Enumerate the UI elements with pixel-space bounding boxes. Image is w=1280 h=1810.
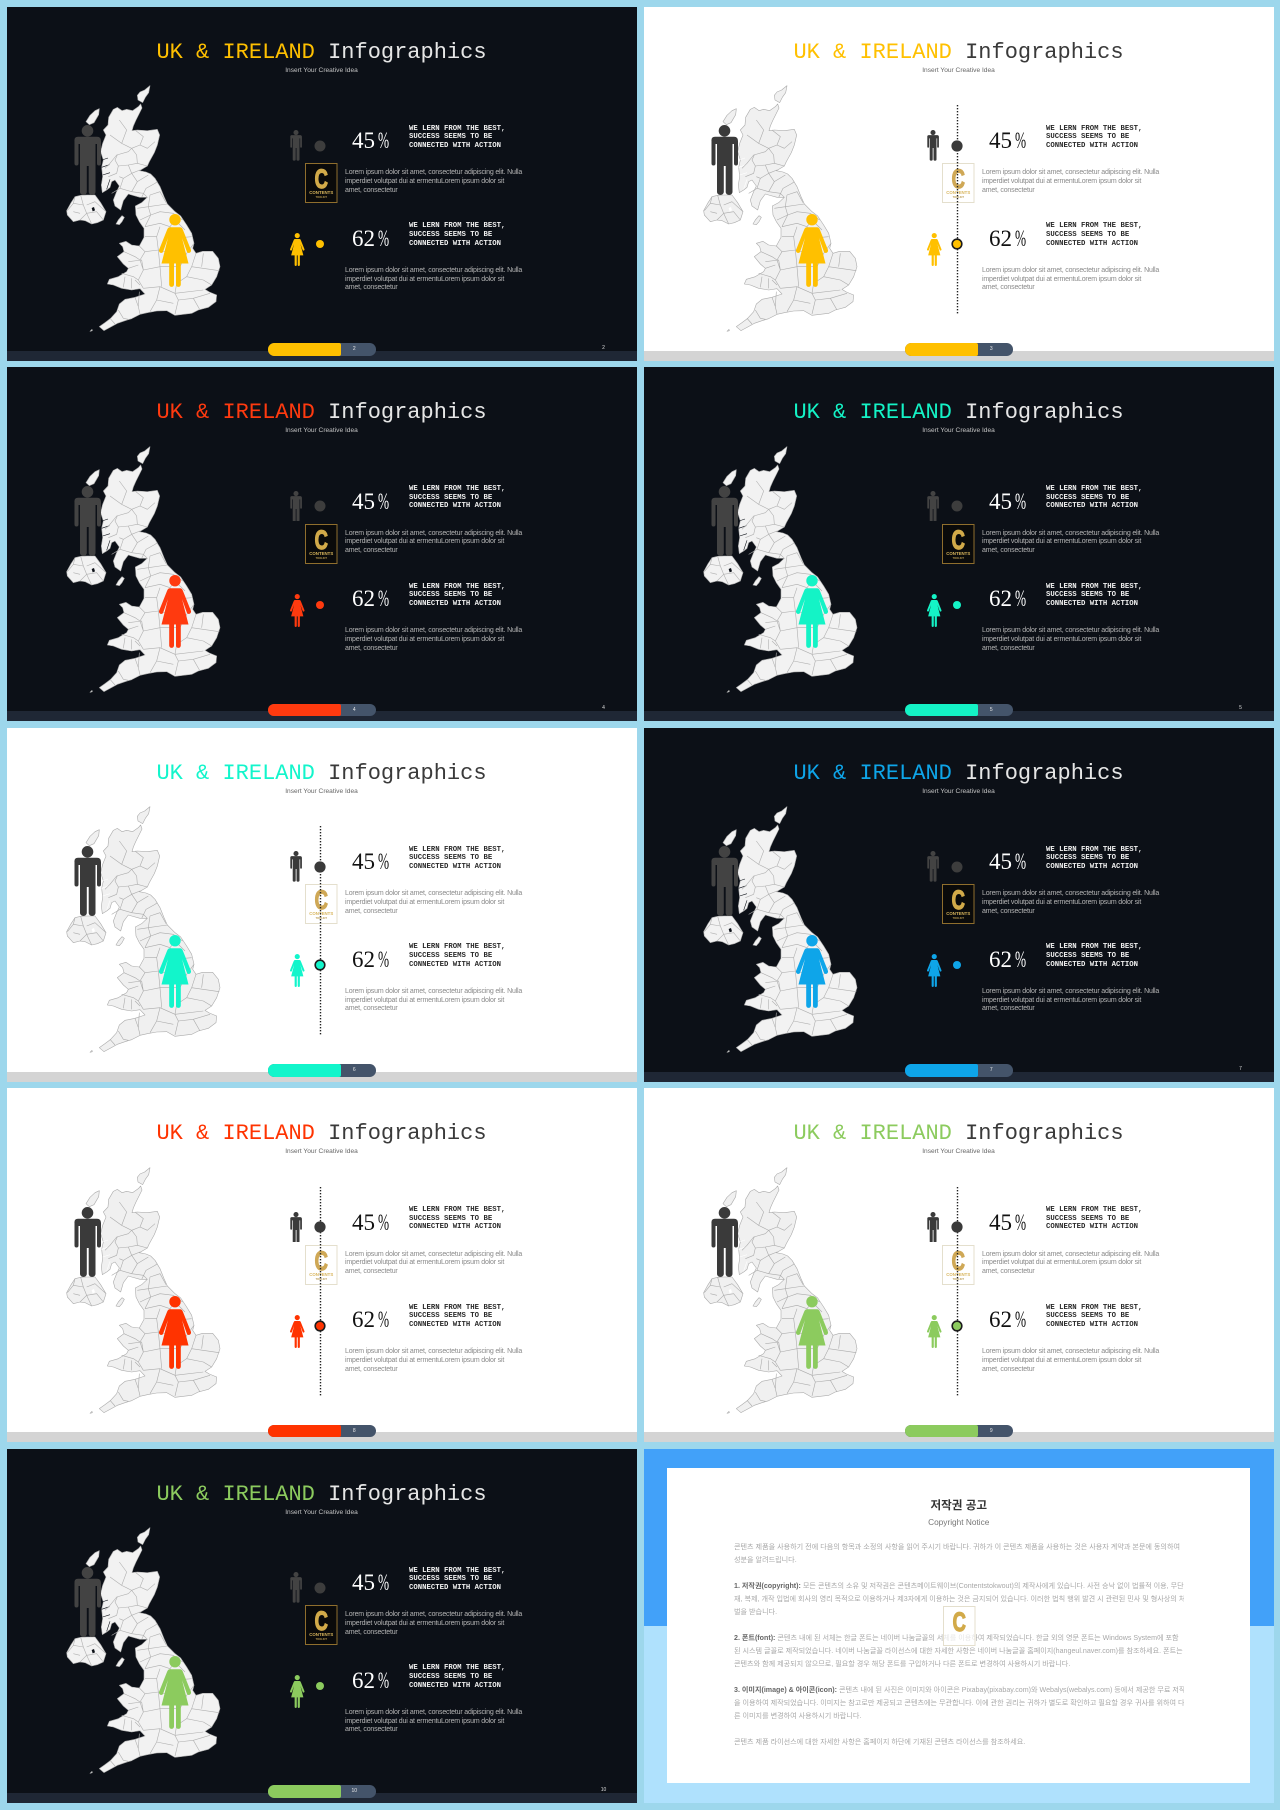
progress pill [905,343,1012,356]
icon: large woman [796,575,828,648]
text block: notice body: 콘텐츠와 함께 제공되지 않으므로, 필요할 경우 해당 폰트를 구입하거나 다른 폰트로 변경하여 사용하시기 바랍니다. [734,1660,1070,1668]
logo: TOOLKIT [316,916,327,920]
icon: large woman [159,214,191,287]
stat: 45%: % [378,1570,389,1595]
heading: first statement: WE LERN FROM THE BEST, SUCCESS SEEMS TO BE CONNECTED WITH ACTION [409,485,505,510]
subtitle: Insert Your Creative Idea [922,66,995,74]
heading: first statement: WE LERN FROM THE BEST, SUCCESS SEEMS TO BE CONNECTED WITH ACTION [409,1566,505,1592]
footer bar [6,1792,637,1802]
stat: 62% [352,1666,397,1694]
progress pill [905,704,1012,716]
icon: small man [290,1212,302,1242]
logo: C [952,884,965,915]
progress pill: 8 [353,1428,356,1434]
logo: CONTENTS [946,1272,970,1276]
icon: large woman [796,935,828,1008]
footer bar [644,350,1274,360]
stat: 62% [989,1306,1034,1334]
text block: notice body: 벌을 받습니다. [734,1608,777,1616]
stat: 45%: % [1015,488,1026,514]
text block: first body: Lorem ipsum dolor sit amet, consectetur adipiscing elit. Nulla imperdiet volutpat dui at ermentuLorem ipsum dolor sit amet, consectetur [982,1251,1159,1275]
heading: first statement: WE LERN FROM THE BEST, SUCCESS SEEMS TO BE CONNECTED WITH ACTION [1046,846,1142,871]
stat: 62%: 62 [352,586,375,611]
marker: grey dot [314,500,326,512]
logo: C [952,1245,965,1275]
icon: small woman [927,954,942,987]
heading: second statement: WE LERN FROM THE BEST, SUCCESS SEEMS TO BE CONNECTED WITH ACTION [409,583,505,608]
stat: 45%: 45 [989,1210,1012,1234]
page number: 2 [602,344,605,350]
stat: 62%: % [378,586,389,611]
text block: first body: Lorem ipsum dolor sit amet, consectetur adipiscing elit. Nulla imperdiet volutpat dui at ermentuLorem ipsum dolor sit amet, consectetur [982,530,1159,554]
icon: large man [74,846,100,916]
logo: C [952,163,965,194]
text block: second body: Lorem ipsum dolor sit amet, consectetur adipiscing elit. Nulla imperdiet volutpat dui at ermentuLorem ipsum dolor sit amet, consectetur [982,1348,1159,1373]
progress pill [905,1064,1012,1077]
text block: second body: Lorem ipsum dolor sit amet, consectetur adipiscing elit. Nulla imperdiet volutpat dui at ermentuLorem ipsum dolor sit amet, consectetur [345,1709,522,1733]
page number: 10 [601,1786,606,1792]
text block: second body: Lorem ipsum dolor sit amet, consectetur adipiscing elit. Nulla imperdiet volutpat dui at ermentuLorem ipsum dolor sit amet, consectetur [345,988,522,1012]
stat: 62%: 62 [989,226,1012,250]
marker: accent dot [313,958,327,972]
logo: C [315,163,328,194]
marker: dark dot [313,1220,327,1234]
progress pill [268,1425,376,1437]
icon: small woman [290,1314,304,1348]
panel: slide 6 light teal [6,728,637,1082]
heading: second statement: WE LERN FROM THE BEST, SUCCESS SEEMS TO BE CONNECTED WITH ACTION [409,1664,505,1690]
stat: 62%: 62 [352,1307,375,1332]
logo: CONTENTS [309,1272,333,1276]
subtitle: Insert Your Creative Idea [285,1148,358,1155]
stat: 62%: % [378,1307,389,1332]
icon: small woman [927,233,942,266]
icon: large man [710,846,738,916]
title: UK & IRELAND Infographics [156,1121,487,1146]
text block: notice body: 을 이용하여 제작되었습니다. 이미지는 참고로만 제공되고 콘텐츠에는 무관합니다. 이에 관한 권리는 귀하가 별도로 확인하고 필요할 경우 귀사를 위하여 다 [734,1699,1184,1707]
stat: 45% [352,1208,397,1236]
footer bar [6,1072,637,1082]
logo: CONTENTS [946,190,970,195]
stat: 62% [352,946,397,974]
heading: first statement: WE LERN FROM THE BEST, SUCCESS SEEMS TO BE CONNECTED WITH ACTION [409,846,505,871]
icon: small man [927,1212,939,1242]
icon: small woman [290,594,304,627]
stat: 62%: % [1015,226,1026,250]
dotted timeline [956,105,958,314]
panel: slide 9 light green [644,1088,1274,1442]
heading: first statement: WE LERN FROM THE BEST, SUCCESS SEEMS TO BE CONNECTED WITH ACTION [1046,485,1142,510]
heading: first statement: WE LERN FROM THE BEST, SUCCESS SEEMS TO BE CONNECTED WITH ACTION [409,1206,505,1231]
logo: CONTENTS [946,911,970,916]
page number: 4 [602,705,605,711]
logo: TOOLKIT [316,556,327,560]
icon: large man [74,1567,100,1637]
logo: CONTENTS [309,911,333,916]
logo: TOOLKIT [316,195,327,199]
icon: small man [927,491,939,521]
marker: dark dot [313,860,327,874]
icon: large man [710,1206,738,1276]
stat: 45%: 45 [352,128,375,153]
footer bar [644,1072,1274,1082]
logo [942,524,974,564]
marker: accent dot [951,238,963,250]
text block: first body: Lorem ipsum dolor sit amet, consectetur adipiscing elit. Nulla imperdiet volutpat dui at ermentuLorem ipsum dolor sit amet, consectetur [982,169,1159,194]
text block: second body: Lorem ipsum dolor sit amet, consectetur adipiscing elit. Nulla imperdiet volutpat dui at ermentuLorem ipsum dolor sit amet, consectetur [982,267,1159,291]
panel: slide 4 dark red [6,367,637,721]
logo: TOOLKIT [953,195,964,199]
map: UK and Ireland [60,1162,240,1432]
heading: copyright notice English: Copyright Notice [928,1517,989,1527]
icon: large man [74,1206,100,1276]
page number: 5 [1239,705,1242,711]
page number: 7 [1239,1066,1242,1072]
progress pill: 10 [351,1788,357,1794]
stat: 45% [352,488,389,514]
progress pill [268,1064,376,1077]
stat: 45% [352,848,397,876]
footer bar [6,711,637,721]
text block: second body: Lorem ipsum dolor sit amet, consectetur adipiscing elit. Nulla imperdiet volutpat dui at ermentuLorem ipsum dolor sit amet, consectetur [345,267,522,291]
map: UK and Ireland [66,446,220,693]
marker: grey dot [950,860,964,874]
stat: 62%: 62 [352,946,375,972]
heading: copyright notice Korean: 저작권 공고 [930,1499,987,1512]
logo [942,1244,974,1284]
title: UK & IRELAND Infographics [156,400,487,425]
text block: notice body: 른 이미지를 변경하여 사용하시기 바랍니다. [734,1712,861,1720]
stat: 62%: % [1015,1307,1026,1332]
logo: C [315,884,328,915]
marker: accent dot [313,1679,327,1693]
marker: grey dot [952,500,962,512]
logo: CONTENTS [946,550,970,556]
subtitle: Insert Your Creative Idea [285,788,358,794]
map: UK and Ireland [60,1522,240,1792]
stat: 62%: % [378,1668,389,1692]
stat: 62% [352,1306,397,1334]
stat: 45%: 45 [352,1210,375,1234]
icon: large woman [159,575,191,648]
logo: TOOLKIT [316,1637,327,1641]
text block: second body: Lorem ipsum dolor sit amet, consectetur adipiscing elit. Nulla imperdiet volutpat dui at ermentuLorem ipsum dolor sit amet, consectetur [345,1348,522,1373]
logo: C [952,524,965,554]
stat: 62%: % [378,226,389,250]
icon: large woman [796,1296,828,1368]
progress pill: 5 [990,707,993,713]
logo: CONTENTS [309,550,333,556]
footer bar [6,1432,637,1442]
icon: small woman [290,954,304,987]
footer bar [6,350,637,360]
icon: small woman [290,1675,304,1708]
icon: small woman [927,594,942,626]
text block: notice body: 콘텐츠 제품 라이선스에 대한 자세한 사항은 홈페이지 하단에 기재된 콘텐츠 라이선스를 참조하세요. [734,1738,1025,1746]
stat: 45% [989,128,1026,153]
stat: 62% [989,946,1034,974]
icon: small woman [290,233,304,266]
subtitle: Insert Your Creative Idea [922,788,995,794]
stat: 62%: 62 [989,586,1012,611]
marker: grey dot [314,140,326,152]
title: UK & IRELAND Infographics [793,40,1124,64]
text block: notice body: 1. 저작권(copyright): 모든 콘텐츠의 소유 및 저작권은 콘텐츠메이트웨이브(Contentstokwout)의 제작사에게 있습니다. 사전 승낙 없이 법률적 이용, 무단전 [734,1582,1184,1590]
stat: 45%: 45 [352,849,375,874]
stat: 45%: % [1015,849,1026,874]
stat: 62% [989,585,1034,613]
heading: second statement: WE LERN FROM THE BEST, SUCCESS SEEMS TO BE CONNECTED WITH ACTION [1046,222,1142,248]
heading: second statement: WE LERN FROM THE BEST, SUCCESS SEEMS TO BE CONNECTED WITH ACTION [1046,943,1142,969]
text block: first body: Lorem ipsum dolor sit amet, consectetur adipiscing elit. Nulla imperdiet volutpat dui at ermentuLorem ipsum dolor sit amet, consectetur [345,890,522,915]
stat: 62%: 62 [989,946,1012,972]
stat: 62%: 62 [989,1307,1012,1332]
stat: 62%: % [1015,586,1026,611]
stat: 62% [352,586,389,611]
logo [942,884,974,924]
progress pill: 3 [990,346,993,352]
text block: first body: Lorem ipsum dolor sit amet, consectetur adipiscing elit. Nulla imperdiet volutpat dui at ermentuLorem ipsum dolor sit amet, consectetur [345,530,522,554]
dotted timeline [956,1186,958,1396]
marker: accent dot [950,1318,964,1332]
map: UK and Ireland [697,1162,877,1432]
stat: 45%: % [378,849,389,874]
marker: dark dot [950,1220,964,1234]
icon: large woman [159,935,191,1008]
stat: 45%: 45 [989,849,1012,874]
title: UK & IRELAND Infographics [793,400,1124,425]
marker: accent dot [316,240,324,248]
progress pill [268,1785,376,1798]
text block: first body: Lorem ipsum dolor sit amet, consectetur adipiscing elit. Nulla imperdiet volutpat dui at ermentuLorem ipsum dolor sit amet, consectetur [345,1251,522,1275]
logo [305,1605,338,1645]
title: UK & IRELAND Infographics [156,760,487,786]
heading: first statement: WE LERN FROM THE BEST, SUCCESS SEEMS TO BE CONNECTED WITH ACTION [1046,1206,1142,1231]
icon: small man [290,130,302,161]
logo: TOOLKIT [316,1276,327,1280]
panel: slide 5 dark teal [644,367,1274,721]
stat: 45% [989,848,1034,876]
stat: 62%: 62 [352,226,375,250]
stat: 45%: % [378,1210,389,1234]
text block: notice body: 성분을 알려드립니다. [734,1556,797,1564]
logo [305,163,338,203]
progress pill: 4 [353,707,356,713]
text block: notice body: 3. 이미지(image) & 아이콘(icon): 콘텐츠 내에 된 사진은 이미지와 아이콘은 Pixabay(pixabay.com)와 Webalys(webalys.com) 등에서 제공한 무료 저작물 [734,1686,1184,1694]
subtitle: Insert Your Creative Idea [285,427,358,434]
heading: second statement: WE LERN FROM THE BEST, SUCCESS SEEMS TO BE CONNECTED WITH ACTION [1046,1304,1142,1329]
text block: second body: Lorem ipsum dolor sit amet, consectetur adipiscing elit. Nulla imperdiet volutpat dui at ermentuLorem ipsum dolor sit amet, consectetur [345,627,522,652]
stat: 45%: % [378,488,389,514]
icon: large man [74,486,101,556]
icon: small man [927,851,939,882]
icon: small woman [927,1314,942,1348]
map: UK and Ireland [703,85,858,332]
stat: 62%: % [1015,946,1026,972]
text block: first body: Lorem ipsum dolor sit amet, consectetur adipiscing elit. Nulla imperdiet volutpat dui at ermentuLorem ipsum dolor sit amet, consectetur [982,890,1159,915]
panel: copyright notice [644,1449,1274,1803]
logo: TOOLKIT [953,556,964,560]
logo [943,1606,976,1646]
logo [305,884,338,924]
stat: 45%: 45 [352,1570,375,1595]
subtitle: Insert Your Creative Idea [285,66,358,74]
logo: C [315,524,328,554]
panel: slide 3 light yellow [644,6,1274,360]
panel: slide 8 light red [6,1088,637,1442]
marker: accent dot [316,601,324,609]
text block: first body: Lorem ipsum dolor sit amet, consectetur adipiscing elit. Nulla imperdiet volutpat dui at ermentuLorem ipsum dolor sit amet, consectetur [345,1611,522,1636]
subtitle: Insert Your Creative Idea [922,1148,995,1155]
stat: 45%: % [1015,1210,1026,1234]
subtitle: Insert Your Creative Idea [922,427,995,434]
progress pill [268,704,376,716]
logo [305,1244,338,1284]
marker: dark dot [951,140,963,152]
stat: 45% [352,128,389,153]
subtitle: Insert Your Creative Idea [285,1508,358,1516]
text block: notice body: 재, 복제, 개작 입법에 회사의 영리 목적으로 이용하거나 제3자에게 이용하는 것은 금지되어 있습니다. 이러한 법칙 행위 발견 시 관련된 민사 및 형사상의 처 [734,1594,1184,1602]
progress pill: 9 [990,1428,993,1434]
stat: 45% [352,1569,397,1597]
progress pill: 2 [353,346,356,352]
icon: small man [290,491,302,521]
icon: large woman [159,1296,191,1368]
text block: notice body: 콘텐츠 제품을 사용하기 전에 다음의 항목과 소정의 사항을 읽어 주시기 바랍니다. 귀하가 이 콘텐츠 제품을 사용하는 것은 사용자 계약과 본문에 동의하여 [734,1543,1180,1551]
marker: accent dot [950,598,964,612]
marker: accent dot [313,1318,327,1332]
stat: 45%: 45 [352,488,375,514]
stat: 45%: 45 [989,128,1012,153]
icon: large woman [796,214,828,287]
marker: grey dot [313,1580,327,1594]
logo: CONTENTS [309,1632,333,1637]
dotted timeline [318,826,322,1035]
stat: 45% [989,488,1034,516]
progress pill: 6 [353,1067,356,1073]
map: UK and Ireland [66,85,220,332]
icon: small man [290,1572,302,1603]
title: UK & IRELAND Infographics [793,760,1124,786]
stat: 62%: 62 [352,1668,375,1692]
text block: first body: Lorem ipsum dolor sit amet, consectetur adipiscing elit. Nulla imperdiet volutpat dui at ermentuLorem ipsum dolor sit amet, consectetur [345,169,522,194]
icon: large woman [159,1656,191,1729]
map: UK and Ireland [60,801,240,1071]
logo: C [315,1605,328,1636]
map: UK and Ireland [697,801,877,1071]
panel: slide 7 dark blue [644,728,1274,1082]
heading: second statement: WE LERN FROM THE BEST, SUCCESS SEEMS TO BE CONNECTED WITH ACTION [409,943,505,969]
logo: C [953,1606,966,1637]
logo [942,163,974,203]
progress pill [268,343,376,356]
heading: first statement: WE LERN FROM THE BEST, SUCCESS SEEMS TO BE CONNECTED WITH ACTION [409,124,505,150]
panel: slide 2 dark yellow [6,6,637,360]
footer bar [644,711,1274,721]
logo: TOOLKIT [953,1276,964,1280]
heading: first statement: WE LERN FROM THE BEST, SUCCESS SEEMS TO BE CONNECTED WITH ACTION [1046,124,1142,150]
stat: 45%: % [378,128,389,153]
text block: notice body: 2. 폰트(font): 콘텐츠 내에 된 서체는 한글 폰트는 네이버 나눔글꼴의 서체를 이용하여 제작되었습니다. 한글 외의 영문 폰트는 Windows System에 포함 [734,1634,1179,1642]
title: UK & IRELAND Infographics [156,1482,487,1506]
footer bar [644,1432,1274,1442]
panel: slide 10 dark green [6,1448,637,1802]
logo [305,524,338,564]
marker: accent dot [950,958,964,972]
icon: large man [74,125,101,195]
icon: small man [927,130,939,161]
text block: second body: Lorem ipsum dolor sit amet, consectetur adipiscing elit. Nulla imperdiet volutpat dui at ermentuLorem ipsum dolor sit amet, consectetur [982,627,1159,652]
icon: small man [290,851,302,882]
progress pill [905,1425,1012,1437]
map: UK and Ireland [703,446,858,693]
text block: second body: Lorem ipsum dolor sit amet, consectetur adipiscing elit. Nulla imperdiet volutpat dui at ermentuLorem ipsum dolor sit amet, consectetur [982,988,1159,1012]
logo: TOOLKIT [953,916,964,920]
icon: large man [712,486,738,556]
stat: 62% [352,226,389,250]
text block: notice body: 된 시스템 글꼴로 제작되었습니다. 네이버 나눔글꼴 라이선스에 대한 자세한 사항은 네이버 나눔글꼴 홈페이지(hangeul.naver.com)를 참조하세요. 폰트는 [734,1647,1183,1655]
stat: 62% [989,226,1026,250]
stat: 45%: 45 [989,488,1012,514]
dotted timeline [318,1186,322,1396]
stat: 45%: % [1015,128,1026,153]
progress pill: 7 [990,1067,993,1073]
heading: second statement: WE LERN FROM THE BEST, SUCCESS SEEMS TO BE CONNECTED WITH ACTION [409,222,505,248]
title: UK & IRELAND Infographics [793,1121,1124,1146]
logo: C [315,1245,328,1275]
icon: large man [711,125,738,195]
logo: CONTENTS [309,190,333,195]
heading: second statement: WE LERN FROM THE BEST, SUCCESS SEEMS TO BE CONNECTED WITH ACTION [1046,583,1142,608]
heading: second statement: WE LERN FROM THE BEST, SUCCESS SEEMS TO BE CONNECTED WITH ACTION [409,1304,505,1329]
stat: 62%: % [378,946,389,972]
text block: notice body [734,1539,1184,1749]
title: UK & IRELAND Infographics [156,40,487,64]
stat: 45% [989,1208,1034,1236]
